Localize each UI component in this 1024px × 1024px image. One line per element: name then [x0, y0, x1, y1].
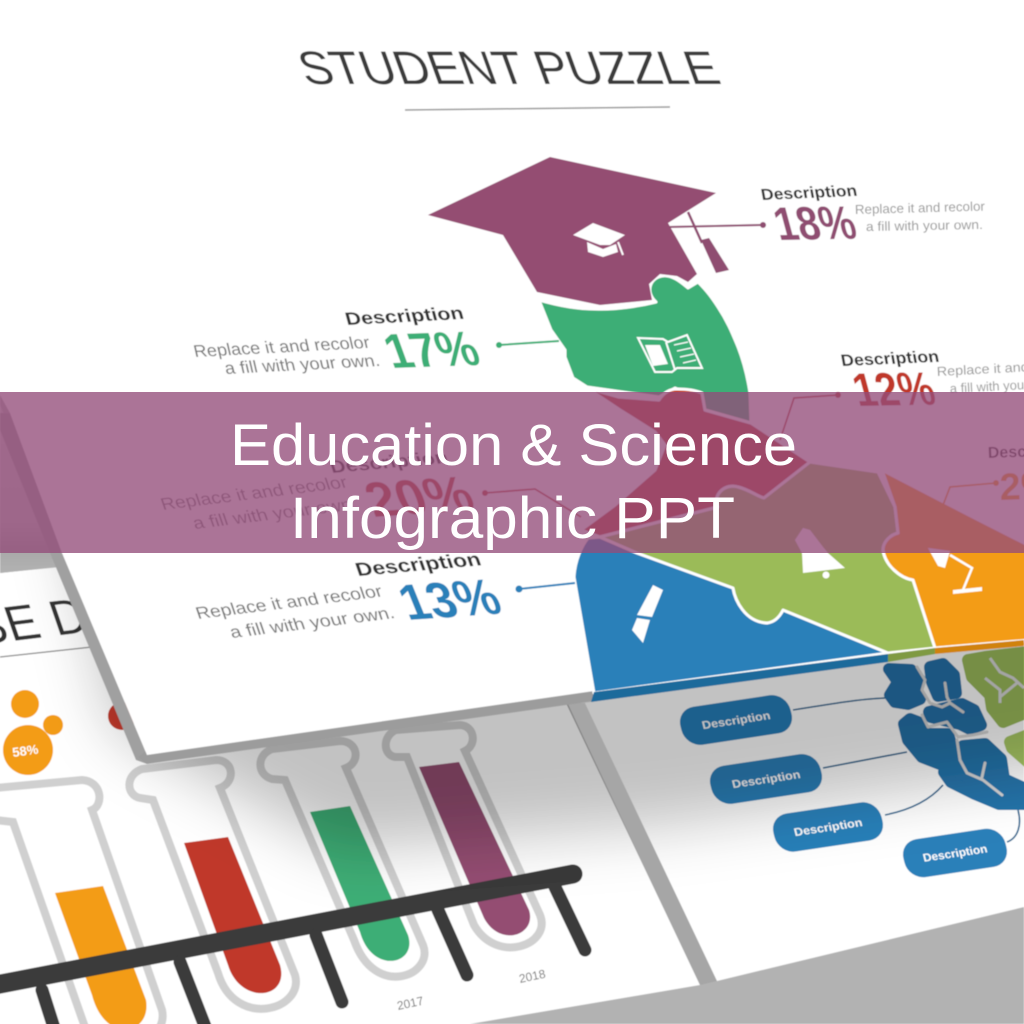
- callout: 17%: [191, 303, 559, 379]
- title underline: [405, 107, 670, 110]
- puzzle graphic: [428, 157, 1024, 693]
- pill 2: [706, 752, 826, 806]
- piece: blue: [574, 537, 888, 693]
- callout: 20%: 20%: [356, 466, 482, 527]
- callout: 12%: Replace it and: [936, 359, 1024, 379]
- icon: desk lamp: [928, 548, 982, 594]
- piece: teal book: [539, 276, 751, 423]
- slide edge: bottom grey thickness: [138, 685, 600, 764]
- callout: 12%: Description: [839, 347, 941, 370]
- banner line 2: Infographic PPT: [290, 486, 735, 551]
- callout: 18%: [759, 182, 986, 251]
- rack bar and legs: [0, 874, 585, 1024]
- slide surface right: [585, 640, 1024, 981]
- tube 1 orange: [0, 780, 163, 1024]
- callout: 18%: Description: [759, 182, 859, 204]
- left grey wedge behind top slide: [0, 405, 66, 573]
- green brain lobes: [968, 652, 1024, 762]
- icon: bell: [795, 528, 845, 578]
- pill 4: Description: [922, 843, 989, 865]
- year label 2018: 2018: [518, 967, 547, 986]
- icon: graduation cap: [573, 223, 625, 257]
- callout: 17%: Description: [343, 303, 466, 329]
- slide surface left: [0, 567, 700, 1024]
- connector lines: [793, 698, 1020, 842]
- blue brain lobes: [889, 664, 1024, 804]
- title: STUDENT PUZZLE: [291, 42, 727, 95]
- callout: 20%: Replace it and recolor: [158, 472, 350, 514]
- piece: light green: [600, 462, 935, 653]
- callout: 13%: [193, 550, 575, 642]
- callout: 13%: 13%: [390, 570, 509, 631]
- banner band: [0, 392, 1024, 553]
- tube 3 green: [260, 741, 425, 977]
- panel: student puzzle slide: [0, 0, 1024, 755]
- callout: 13%: Description: [353, 550, 484, 581]
- callout: 17%: Replace it and recolor: [191, 332, 372, 361]
- heading rule: [0, 647, 92, 657]
- panel: test tube chart slide: [0, 567, 700, 1024]
- cast shadow of top slide: [44, 568, 1024, 880]
- pill 3: Description: [793, 817, 864, 839]
- pill 1: [676, 693, 796, 747]
- pill 1: Description: [701, 710, 772, 732]
- bubbles: [3, 690, 136, 775]
- icon: marker pen: [632, 585, 663, 643]
- callout: 13%: a fill with your own.: [227, 603, 397, 642]
- callout: 17%: a fill with your own.: [222, 350, 382, 378]
- callout: 20%: Description: [326, 446, 451, 477]
- callout: 18%: Replace it and recolor: [855, 199, 986, 217]
- callout: orange partial: [940, 442, 1024, 513]
- callout: 17%: 17%: [376, 321, 487, 379]
- piece: graduation cap: [428, 157, 716, 305]
- tube 4 purple: [386, 725, 542, 947]
- bubbles: 58%: [11, 741, 40, 760]
- pill 3: [769, 800, 887, 854]
- year label 2017: 2017: [396, 994, 425, 1013]
- banner heading: [230, 413, 797, 551]
- cap tassel and leader: [669, 212, 766, 273]
- callout: 20%: a fill with your own.: [190, 494, 360, 533]
- callout: 13%: Replace it and recolor: [193, 581, 385, 623]
- gutter between lower slides: [566, 703, 717, 985]
- callout: 18%: a fill with your own.: [866, 217, 983, 234]
- callout: 12%: [780, 347, 1024, 440]
- panel: brain slide: [585, 640, 1024, 981]
- callout: 18%: 18%: [768, 197, 862, 251]
- pill 2: Description: [731, 769, 802, 791]
- slab edges of puzzle: [591, 640, 1024, 702]
- piece: crimson: [581, 388, 810, 537]
- banner line 1: Education & Science: [230, 413, 797, 478]
- pill 4: [899, 826, 1011, 880]
- slide edge: left grey thickness: [0, 413, 147, 764]
- callout: 12%: 12%: [847, 363, 941, 417]
- piece: orange: [882, 470, 1024, 648]
- callout: 20%: [158, 446, 581, 533]
- icon: open book: [638, 335, 702, 372]
- tube 2 red: [129, 760, 296, 1009]
